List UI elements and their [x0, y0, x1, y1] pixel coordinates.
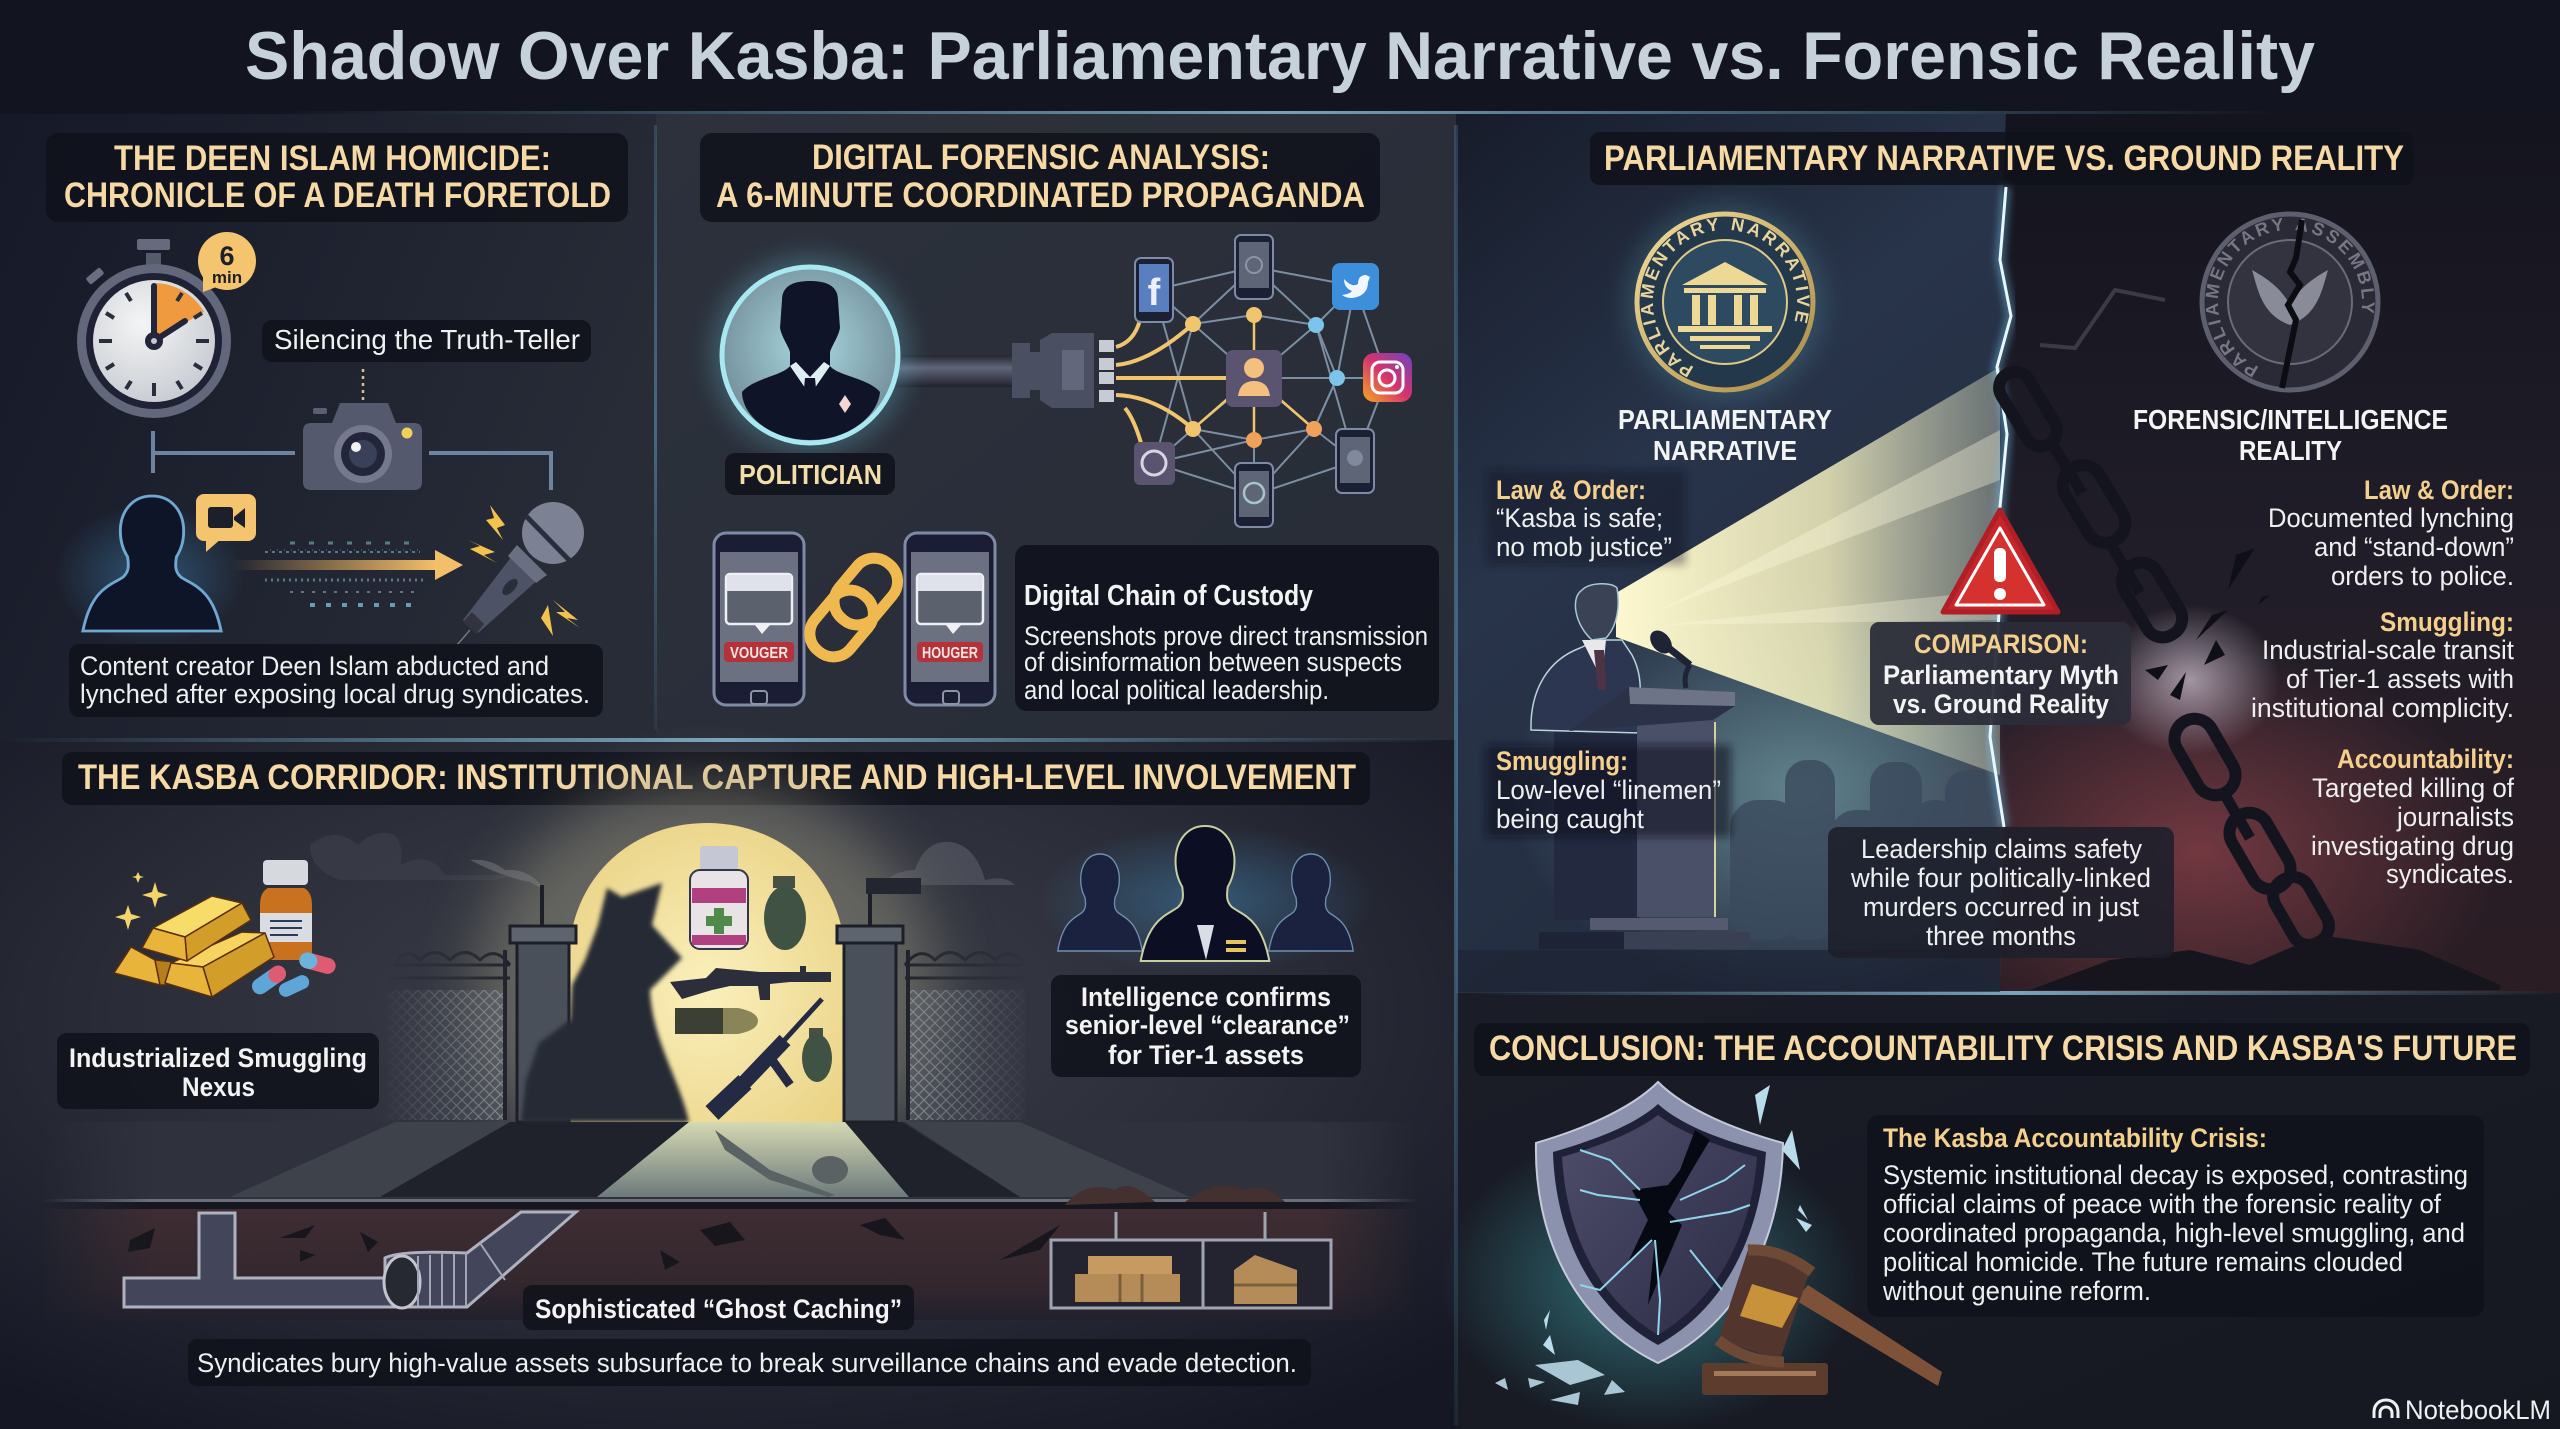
heading: corridor: [62, 752, 1370, 805]
seal: parliamentary: [1620, 196, 1830, 407]
icon: gavel: [1702, 1250, 1942, 1395]
text: smuggling, reality: of Tier-1 assets with: [2286, 664, 2514, 694]
light pool with shadow: [597, 1122, 909, 1197]
floor shadow: [1458, 950, 2000, 992]
caption: syndicates: Syndicates bury high-value assets subsurface to break surveillance chains and evade detection.: [197, 1348, 1297, 1378]
clouds and smoke: [310, 833, 1015, 890]
glow behind shield: [1440, 1130, 1860, 1429]
text: law and order, parliamentary: Law & Order:: [1496, 475, 1646, 505]
rubble: [2030, 935, 2500, 990]
label: smuggling nexus: [57, 1033, 379, 1109]
panel background: conclusion: [1456, 993, 2560, 1429]
callout: comparison: COMPARISON:: [1914, 629, 2088, 659]
icon: chain shards: [2145, 548, 2270, 700]
panel: Kasba corridor: [40, 752, 1420, 1386]
text: accountability crisis: The Kasba Accountability Crisis:: [1883, 1123, 2267, 1153]
icon: camera: [303, 403, 422, 490]
icon: instagram app: [1363, 353, 1412, 402]
heading: homicide: [46, 133, 628, 222]
caption: syndicates: [188, 1339, 1311, 1386]
icon: screenshot phone right: HOUGER: [922, 645, 978, 662]
label: silencing the truth-teller: Silencing the Truth-Teller: [274, 324, 580, 355]
panel background: Kasba corridor: [0, 740, 1456, 1429]
lit haze: below the beam: [1510, 580, 2090, 1000]
title: Shadow Over Kasba: Parliamentary Narrative vs. Forensic Reality: [245, 18, 2315, 94]
icon: gold bars: [114, 896, 274, 997]
moonlit gate opening: [569, 823, 845, 1122]
icon: bottom right phone: [1336, 429, 1374, 493]
text: accountability crisis: coordinated propaganda, high-level smuggling, and: [1883, 1218, 2465, 1248]
icon: microphone: [457, 502, 584, 645]
callout: comparison: vs. Ground Reality: [1893, 689, 2109, 719]
badge: 6 min: min: [212, 268, 242, 287]
callout: leadership claims: murders occurred in just: [1863, 892, 2139, 922]
badge: 6 min: 6: [219, 241, 235, 271]
caption: Deen Islam: Content creator Deen Islam abducted and: [80, 651, 549, 681]
text: smuggling, reality: institutional complicity.: [2251, 693, 2514, 723]
text: law and order, reality: Law & Order:: [2364, 475, 2514, 505]
caption: Deen Islam: lynched after exposing local drug syndicates.: [80, 679, 590, 709]
text: digital chain of custody: and local political leadership.: [1024, 675, 1329, 705]
label: parliamentary narrative: [1618, 404, 1832, 466]
panel background: digital forensic: [656, 114, 1456, 740]
icon: screenshot phone left: [714, 533, 804, 705]
text: digital chain of custody: Digital Chain of Custody: [1024, 580, 1313, 612]
text: law and order, parliamentary: no mob justice”: [1496, 532, 1672, 562]
seal: broken reality: PARLIAMENTARY ASSEMBLY: [2206, 218, 2375, 378]
network graph: [1116, 267, 1387, 495]
icon: central user: [1226, 350, 1282, 407]
fences: [388, 950, 1025, 1120]
icon: pills: [249, 951, 337, 999]
label: politician: [725, 453, 895, 495]
label: politician: POLITICIAN: [739, 459, 882, 490]
panel background: parliamentary narrative side: [1456, 114, 2011, 993]
icon: data cable and plug: [896, 333, 1114, 408]
label: parliamentary narrative: PARLIAMENTARY: [1618, 404, 1832, 435]
callout: comparison: [1870, 622, 2131, 725]
icon: politician portrait: [710, 255, 910, 455]
icon: broken chain top: [1993, 366, 2189, 644]
text: law and order, parliamentary: [1486, 470, 1686, 565]
heading: corridor: THE KASBA CORRIDOR: INSTITUTIONAL CAPTURE AND HIGH-LEVEL INVOLVEMENT: [78, 758, 1356, 797]
burst behind chain break: [2100, 605, 2280, 755]
tunnel pipe: [124, 1212, 576, 1308]
contraband: medicine bottle: [690, 846, 748, 949]
badge: 6 min: [198, 232, 256, 292]
icon: stopwatch: [77, 239, 231, 418]
text: digital chain of custody: Screenshots prove direct transmission: [1024, 621, 1428, 651]
heading: forensic: [700, 133, 1380, 222]
panel: parliamentary narrative vs ground reality: [1458, 132, 2514, 992]
label: forensic reality: FORENSIC/INTELLIGENCE: [2133, 404, 2448, 435]
label: forensic reality: REALITY: [2239, 435, 2342, 466]
icon: facebook phone: [1135, 258, 1173, 322]
icon: twitter app: [1332, 263, 1379, 310]
wolf silhouette: [521, 883, 689, 1122]
crowd silhouettes: [1730, 760, 1997, 940]
icon: screenshot phone right: [905, 533, 995, 705]
heading: narrative vs reality: [1590, 132, 2414, 185]
label: silencing the truth-teller: [262, 320, 591, 362]
text: accountability, reality: journalists: [2396, 802, 2514, 832]
label: ghost caching: [523, 1285, 914, 1330]
text: digital chain of custody: [1015, 545, 1439, 711]
underground caches: [1051, 1212, 1331, 1308]
text: accountability crisis: official claims of peace with the forensic reality of: [1883, 1189, 2441, 1219]
label: clearance: senior-level “clearance”: [1065, 1010, 1350, 1040]
label: parliamentary narrative: NARRATIVE: [1653, 435, 1797, 466]
heading: narrative vs reality: PARLIAMENTARY NARRATIVE VS. GROUND REALITY: [1604, 139, 2404, 178]
label: forensic reality: [2133, 404, 2448, 466]
text: accountability, reality: Targeted killing of: [2312, 773, 2514, 803]
contraband: rifle: [670, 966, 831, 1000]
icon: cracked shield: [1536, 1082, 1812, 1363]
panel background: homicide: [0, 114, 656, 740]
text: digital chain of custody: of disinformation between suspects: [1024, 647, 1402, 677]
red glow: reality side: [1900, 650, 2500, 1050]
seal: parliamentary: PARLIAMENTARY NARRATIVE: [1640, 218, 1810, 378]
callout: leadership claims: [1828, 827, 2174, 958]
text: law and order, reality: orders to police.: [2331, 561, 2514, 591]
label: clearance: for Tier-1 assets: [1108, 1040, 1304, 1070]
crack: lightning divide: [1990, 187, 2011, 827]
text: accountability crisis: [1867, 1115, 2484, 1317]
label: clearance: [1051, 975, 1361, 1077]
text: smuggling, reality: Industrial-scale transit: [2262, 635, 2514, 665]
label: smuggling nexus: Industrialized Smuggling: [69, 1043, 367, 1073]
text: accountability, reality: syndicates.: [2386, 859, 2514, 889]
logo: NotebookLM: NotebookLM: [2405, 1395, 2551, 1425]
text: law and order, reality: [2268, 475, 2514, 591]
text: law and order, parliamentary: “Kasba is safe;: [1496, 503, 1663, 533]
data stream: [265, 543, 425, 605]
text: law and order, reality: and “stand-down”: [2314, 532, 2514, 562]
heading: homicide: THE DEEN ISLAM HOMICIDE:: [114, 139, 551, 178]
icon: gold chain link: [799, 549, 908, 666]
callout: comparison: Parliamentary Myth: [1883, 660, 2119, 690]
panel: digital forensic analysis: [700, 133, 1439, 711]
text: smuggling, parliamentary: Smuggling:: [1496, 746, 1628, 776]
icon: speaker at podium: [1531, 584, 1750, 949]
text: law and order, reality: Documented lynching: [2268, 503, 2514, 533]
text: smuggling, parliamentary: [1486, 745, 1731, 837]
callout: leadership claims: three months: [1926, 921, 2076, 951]
contraband: assault rifle: [712, 999, 822, 1113]
text: smuggling, parliamentary: Low-level “linemen”: [1496, 775, 1721, 805]
text: accountability crisis: without genuine reform.: [1882, 1276, 2151, 1306]
text: accountability, reality: Accountability:: [2337, 744, 2514, 774]
text: smuggling, reality: [2251, 607, 2514, 723]
icon: facebook phone: f: [1148, 272, 1161, 314]
icon: senior officials: [1035, 825, 1375, 975]
underground soil: [40, 1186, 1420, 1320]
icon: screenshot phone left: VOUGER: [730, 645, 788, 662]
heading: homicide: CHRONICLE OF A DEATH FORETOLD: [64, 176, 611, 215]
gate posts: [510, 878, 921, 1122]
spotlight beam: [1616, 367, 2000, 775]
icon: bottom left app: [1134, 442, 1175, 485]
icon: shield fragments: [1495, 1360, 1625, 1405]
icon: broken chain bottom: [2167, 711, 2335, 952]
label: smuggling nexus: Nexus: [182, 1072, 255, 1102]
panel: conclusion: [1440, 1023, 2551, 1429]
arrow: toward microphone: [231, 550, 463, 580]
icon: bottom phone: [1235, 463, 1273, 527]
icon: pill bottle: [260, 860, 312, 960]
contraband: bullet: [675, 1008, 758, 1034]
faint crack line on reality side: [2040, 290, 2165, 348]
callout: leadership claims: while four politically-linked: [1850, 863, 2151, 893]
contraband: grenade: [764, 876, 806, 950]
moon halo: [477, 780, 937, 1200]
heading: forensic: DIGITAL FORENSIC ANALYSIS:: [812, 138, 1270, 177]
contraband: small grenade: [802, 1028, 832, 1082]
text: smuggling, parliamentary: being caught: [1496, 804, 1644, 834]
ground: [134, 1122, 1362, 1199]
panel: Deen Islam homicide: [46, 133, 628, 717]
text: accountability, reality: investigating drug: [2311, 831, 2514, 861]
text: accountability, reality: [2311, 744, 2514, 889]
icon: video speech bubble: [196, 494, 256, 552]
icon: creator silhouette: [55, 496, 245, 645]
text: accountability crisis: Systemic institutional decay is exposed, contrasting: [1883, 1160, 2468, 1190]
text: smuggling, reality: Smuggling:: [2380, 607, 2514, 637]
label: clearance: Intelligence confirms: [1081, 982, 1331, 1012]
panel background: forensic reality side: [1990, 114, 2560, 993]
caption: Deen Islam: [69, 644, 603, 717]
callout: leadership claims: Leadership claims safety: [1861, 834, 2142, 864]
heading: forensic: A 6-MINUTE COORDINATED PROPAGANDA: [716, 176, 1365, 215]
text: accountability crisis: political homicide. The future remains clouded: [1883, 1247, 2403, 1277]
icon: warning triangle: [1943, 510, 2058, 612]
icon: top phone: [1235, 235, 1273, 299]
connector lines around camera: [153, 369, 551, 490]
label: ghost caching: Sophisticated “Ghost Caching”: [535, 1294, 902, 1324]
icon: sparkles: [115, 872, 168, 930]
